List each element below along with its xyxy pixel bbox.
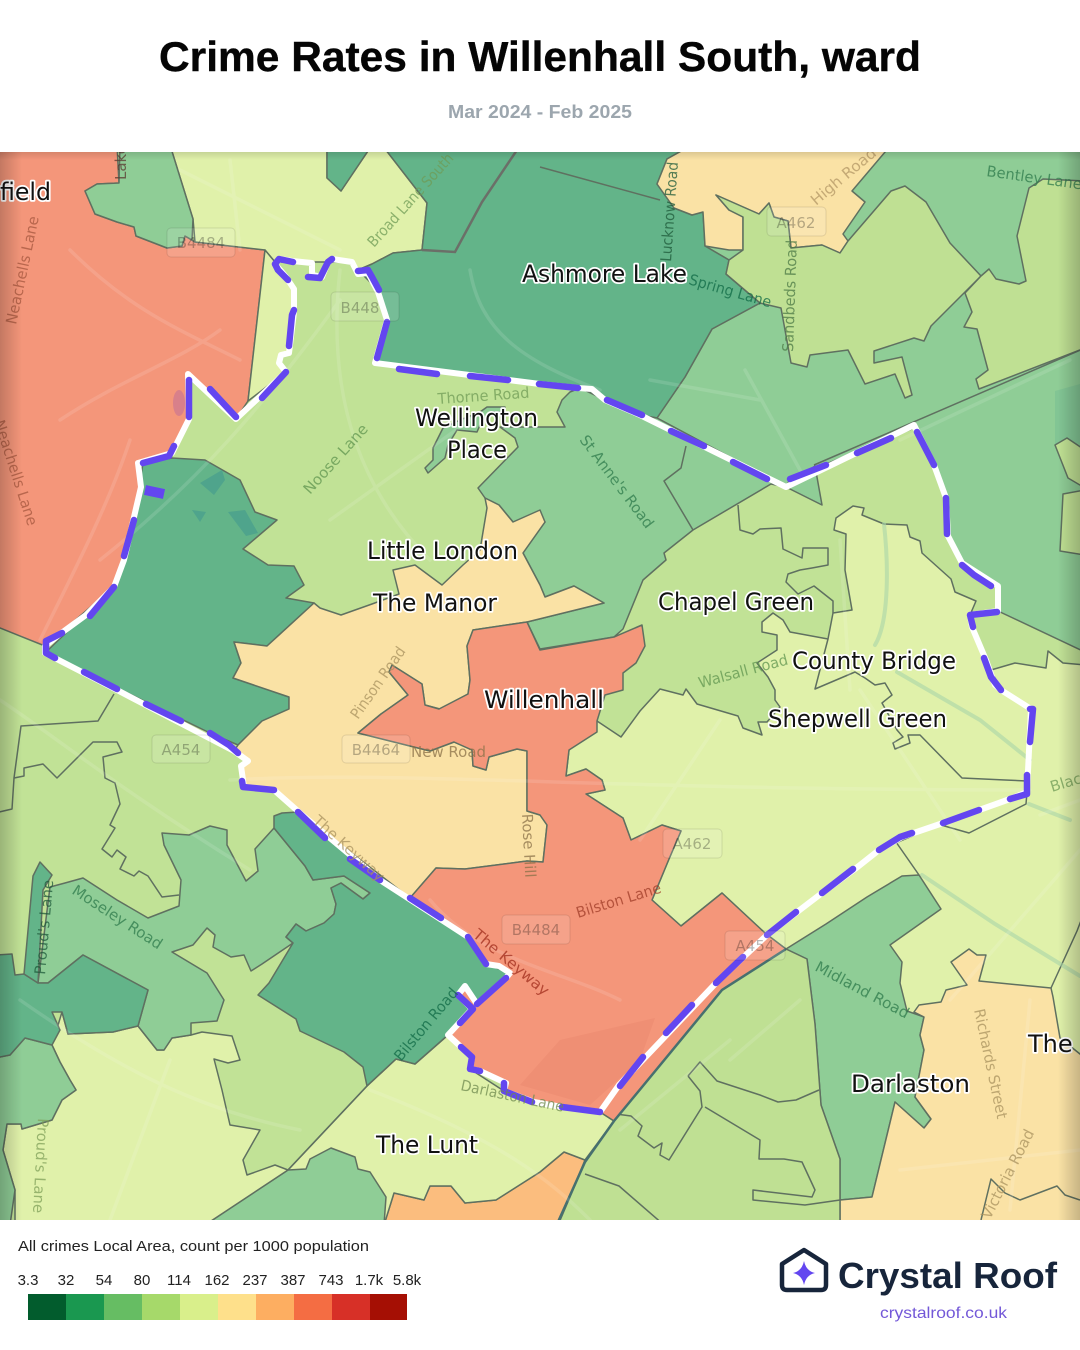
road names: Spring Lane <box>687 271 774 311</box>
region: road texture <box>0 160 1080 1220</box>
region: dark green west <box>45 458 314 745</box>
region: mid green bottom <box>205 1148 386 1225</box>
title: Crime Rates in Willenhall South, ward <box>159 33 921 80</box>
place labels: Little London <box>367 537 518 565</box>
road shields: B4484 <box>177 234 225 252</box>
road names: Bilston Lane <box>574 879 663 922</box>
brand logo <box>782 1250 1058 1322</box>
road names: Proud's Lane <box>31 879 57 975</box>
place labels: Ashmore Lake <box>522 260 687 288</box>
place labels: field <box>0 178 51 206</box>
road names: Sandbeds Road <box>779 240 801 352</box>
region: cream north <box>657 145 891 253</box>
legend tick labels <box>18 1272 422 1289</box>
legend tick labels: 114 <box>167 1272 191 1289</box>
legend tick labels: 3.3 <box>18 1272 38 1289</box>
road shields: A454 <box>162 741 200 759</box>
legend tick labels: 387 <box>280 1272 306 1289</box>
website url: crystalroof.co.uk <box>880 1305 1008 1322</box>
region: salmon Willenhall <box>358 622 786 1121</box>
region: pale strip <box>248 250 294 401</box>
road names: The Keyway <box>469 925 553 1000</box>
road shields <box>152 207 826 960</box>
region: mid green Moseley <box>38 826 370 1050</box>
region: light green south-east <box>558 949 840 1225</box>
region: light green Sandbeds <box>716 186 981 398</box>
region: orange south <box>384 1152 585 1225</box>
legend tick labels: 54 <box>96 1272 112 1289</box>
region: inner boundary lines <box>738 505 833 613</box>
region: cream The Manor <box>233 498 604 898</box>
region: pale County Bridge / Shepwell Green <box>566 506 1031 935</box>
road names: Noose Lane <box>300 420 372 498</box>
road names: Walsall Road <box>696 651 790 692</box>
region: pale north <box>170 145 427 270</box>
legend tick labels: 743 <box>318 1272 344 1289</box>
region: mid green St Anne's <box>478 388 786 649</box>
region: mid green north-west <box>85 145 193 248</box>
ward boundary: white base <box>45 259 1031 1112</box>
legend tick labels: 32 <box>58 1272 74 1289</box>
road shields: A462 <box>777 214 815 232</box>
road names <box>0 144 1080 1222</box>
wordmark: Crystal Roof <box>838 1255 1058 1296</box>
region: mid green Midland Road <box>786 875 941 1200</box>
region: pale The Lunt <box>288 1038 612 1220</box>
legend tick labels: 5.8k <box>393 1272 422 1289</box>
place labels: Shepwell Green <box>768 705 947 733</box>
road names: Moseley Road <box>69 881 166 953</box>
region: mid green north-east <box>657 145 1080 652</box>
road names: New Road <box>411 743 486 761</box>
ward boundary: purple dashes <box>46 259 1033 1112</box>
legend tick labels: 80 <box>134 1272 150 1289</box>
legend tick labels: 237 <box>242 1272 268 1289</box>
place labels: The Manor <box>372 589 497 617</box>
region: cream Darlaston <box>840 949 1080 1225</box>
road names: Neachells Lane <box>2 214 43 326</box>
road names: High Road <box>807 144 880 209</box>
road names: Midland Road <box>812 958 912 1022</box>
legend colour bar <box>28 1294 407 1320</box>
legend <box>18 1238 422 1320</box>
legend tick labels: 162 <box>204 1272 230 1289</box>
road names: The Keyway <box>309 811 388 885</box>
place labels: Chapel Green <box>658 588 814 616</box>
road names: Bilston Road <box>390 984 462 1065</box>
road names: St Anne's Road <box>576 432 658 532</box>
road names: Richards Street <box>970 1007 1011 1120</box>
road names: Pinson Road <box>347 643 409 722</box>
road shields: B4464 <box>352 741 400 759</box>
road names: Darlaston Lane <box>459 1076 566 1116</box>
region: light green Bentley <box>964 179 1080 389</box>
place labels <box>0 178 1080 1159</box>
region: dark green south-west <box>0 954 148 1058</box>
region: pale south-east <box>767 651 1080 1065</box>
region: salmon north-west <box>0 145 265 646</box>
place labels: Willenhall <box>484 686 604 714</box>
road names: Lucknow Road <box>657 161 682 262</box>
place labels: The Lunt <box>375 1131 478 1159</box>
region: mid green triangle <box>786 466 822 505</box>
marker: purple spot on salmon area <box>173 390 185 416</box>
road names: Lake <box>112 145 130 180</box>
road names: Thorne Road <box>436 384 530 408</box>
place labels: Place <box>447 436 507 464</box>
road shields: B4484 <box>512 921 560 939</box>
region: mid green south-west <box>0 1038 76 1225</box>
road shields: A462 <box>673 835 711 853</box>
road names: Rose Hill <box>518 813 539 878</box>
road shields: A454 <box>736 937 774 955</box>
region: dark green Ashmore Lake <box>358 145 760 418</box>
legend tick labels: 1.7k <box>355 1272 384 1289</box>
icon: house with star <box>782 1250 826 1290</box>
subtitle: date range: Mar 2024 - Feb 2025 <box>448 102 632 122</box>
road shields: B448 <box>341 299 379 317</box>
region: pale south-west <box>3 1012 288 1225</box>
road names: Proud's Lane <box>29 1118 52 1214</box>
place labels: Darlaston <box>851 1070 970 1098</box>
region: dark green Keyway <box>258 812 510 1086</box>
place labels: County Bridge <box>792 647 956 675</box>
canals and streams <box>875 524 1080 976</box>
place labels: Wellington <box>415 404 538 432</box>
legend title: All crimes Local Area, count per 1000 population <box>18 1238 369 1255</box>
road names: Broad Lane South <box>364 149 457 251</box>
road names: Victoria Road <box>978 1126 1038 1222</box>
region: thin green arm Wellington Place <box>425 407 505 473</box>
region: light west inner lines <box>0 694 114 813</box>
map edge shadows <box>0 152 1080 1220</box>
